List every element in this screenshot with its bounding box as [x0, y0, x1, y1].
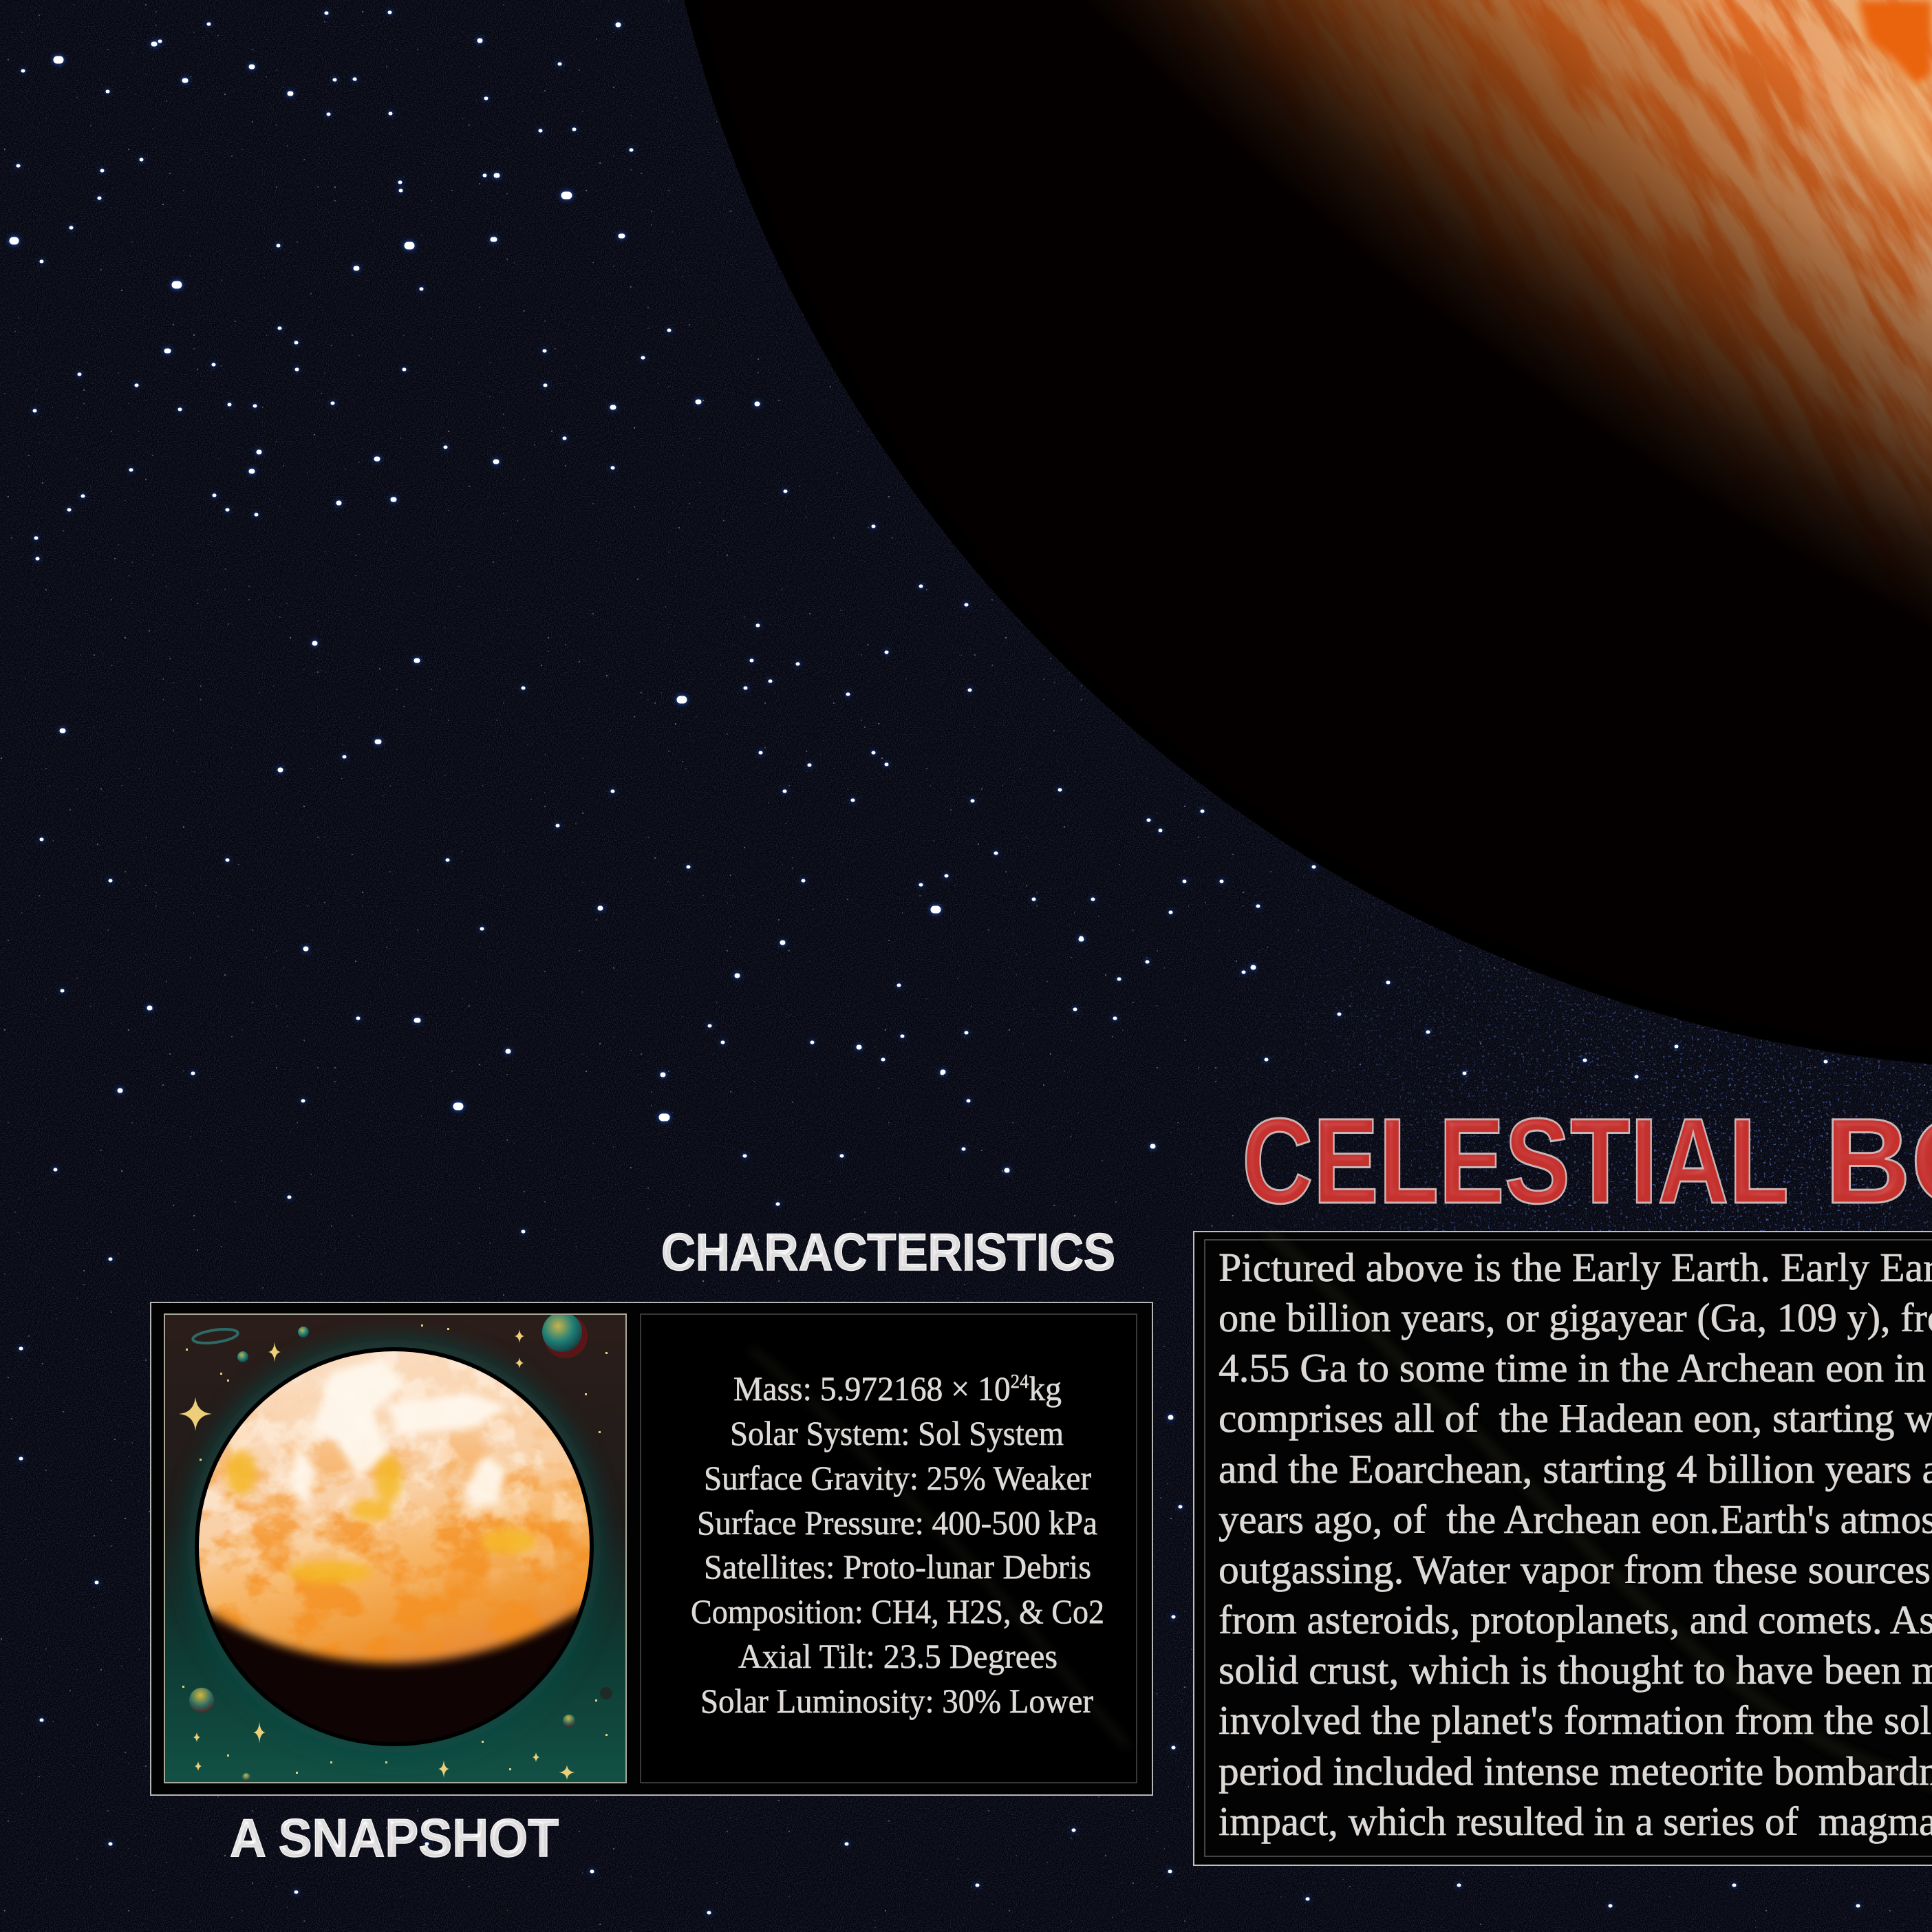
text: statistics: Solar System: Sol System: [730, 1414, 1064, 1452]
icon: tiny moons: [189, 1327, 612, 1781]
icon: early earth globe: [193, 1342, 599, 1746]
icon: gold sparkle stars: [179, 1324, 608, 1780]
text: description paragraph: comprises all of the Hadean eon, starting w: [1219, 1395, 1932, 1441]
panel: description text: [1194, 1232, 1932, 1865]
icon: ringed planet: [192, 1327, 239, 1346]
text: description paragraph: solid crust, which is thought to have been m: [1219, 1647, 1932, 1693]
text: description paragraph: years ago, of the Archean eon.Earth's atmos: [1219, 1496, 1932, 1542]
text: description paragraph: [1219, 1245, 1932, 1844]
heading: a snapshot: A SNAPSHOT: [230, 1807, 559, 1868]
text: description paragraph: outgassing. Water vapor from these sources: [1219, 1547, 1931, 1592]
text: statistics: Mass: 5.972168 × 10: [733, 1369, 1024, 1408]
text: statistics: kg: [1029, 1369, 1062, 1408]
text: statistics: Surface Pressure: 400-500 kPa: [697, 1503, 1097, 1542]
text: description paragraph: from asteroids, protoplanets, and comets. As: [1219, 1597, 1932, 1642]
text: statistics: Composition: CH4, H2S, & Co2: [691, 1592, 1104, 1631]
heading: CELESTIAL BO: CELESTIAL: [1242, 1094, 1789, 1229]
text: description paragraph: Pictured above is the Early Earth. Early Ear: [1219, 1245, 1932, 1290]
text: statistics: Axial Tilt: 23.5 Degrees: [738, 1637, 1058, 1675]
text: description paragraph: involved the planet's formation from the sol: [1219, 1697, 1931, 1743]
heading: characteristics: CHARACTERISTICS: [661, 1223, 1115, 1282]
text: description paragraph: and the Eoarchean, starting 4 billion years a: [1219, 1446, 1932, 1492]
text: description paragraph: 4.55 Ga to some time in the Archean eon in: [1219, 1345, 1926, 1391]
text: statistics: 24: [1011, 1371, 1029, 1393]
panel: snapshot and characteristics: [151, 1302, 1152, 1795]
text: statistics: [691, 1369, 1104, 1720]
icon: small teal planet top right: [542, 1312, 588, 1358]
text: statistics: Solar Luminosity: 30% Lower: [700, 1682, 1093, 1720]
text: description paragraph: impact, which resulted in a series of magma: [1219, 1799, 1932, 1844]
panel: planet snapshot illustration: [164, 1312, 626, 1783]
panel: characteristics list: [641, 1314, 1137, 1783]
text: description paragraph: period included intense meteorite bombardm: [1219, 1748, 1932, 1794]
text: statistics: Surface Gravity: 25% Weaker: [704, 1459, 1091, 1497]
text: statistics: Satellites: Proto-lunar Debris: [704, 1547, 1091, 1586]
